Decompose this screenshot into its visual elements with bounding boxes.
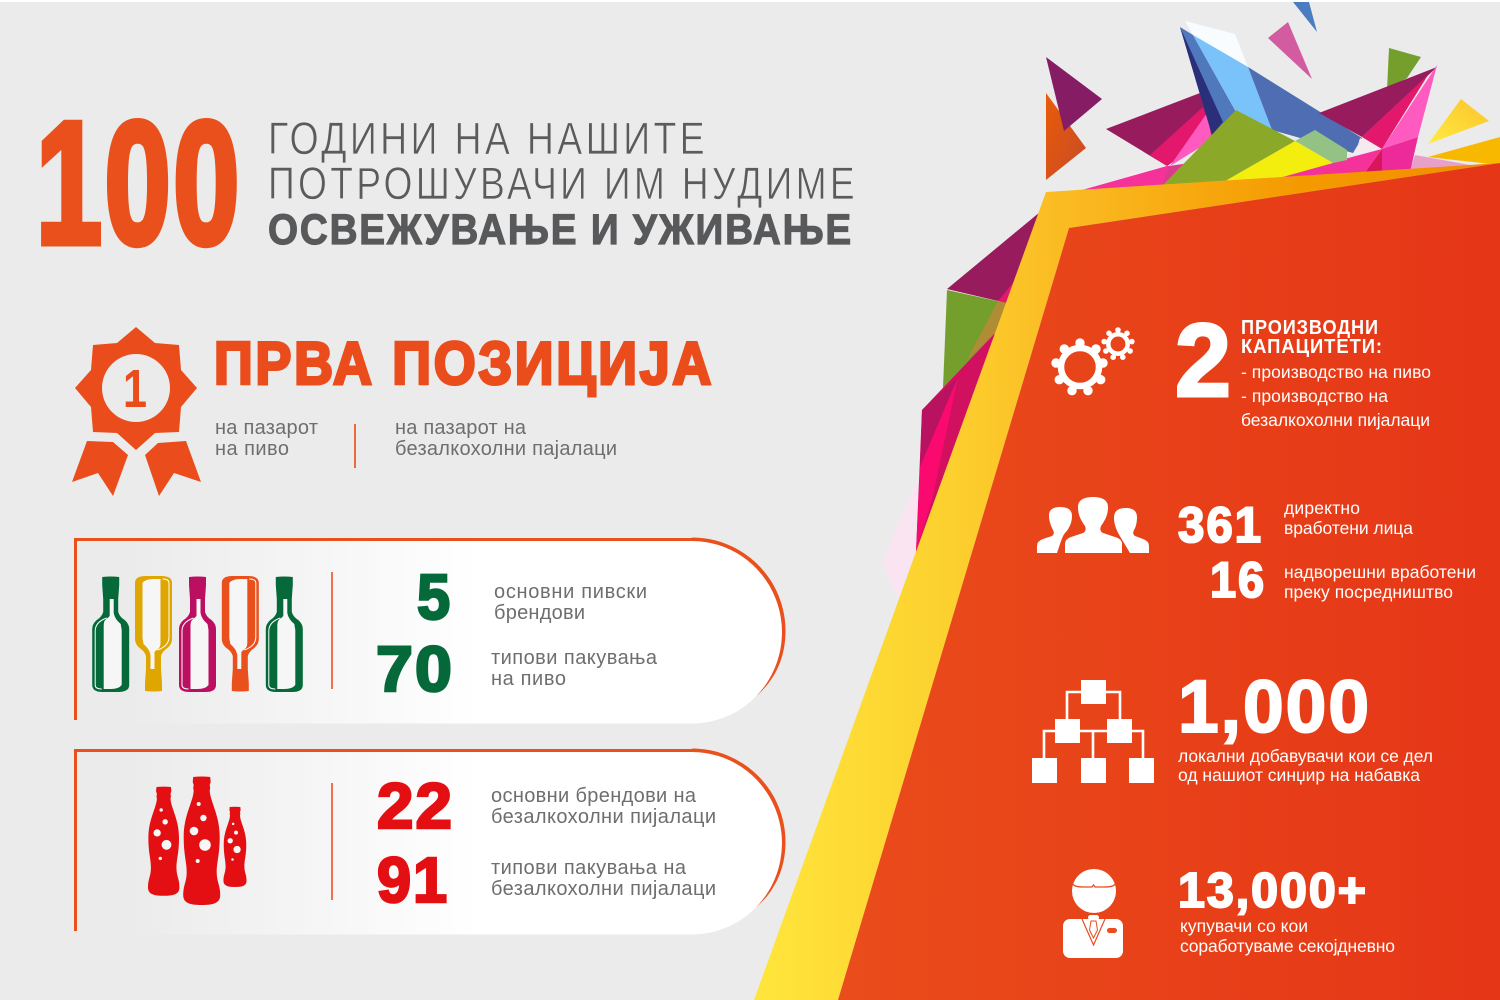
stat: 16 external employees: [1210, 552, 1476, 608]
number: 22 soft drink brands: 22: [377, 770, 454, 842]
stat: 16 external employees: надворешни вработени: [1284, 562, 1476, 582]
stat: 13,000+ customers: [1178, 864, 1395, 956]
icon: medal badge: [72, 327, 201, 496]
icon: gears: [1051, 327, 1135, 395]
stat: 16 external employees: 16: [1210, 552, 1266, 608]
stat: 2 production capacities: - производство на: [1241, 386, 1388, 406]
stat: 16 external employees: преку посредништво: [1284, 582, 1453, 602]
stat: 1,000 suppliers: локални добавувачи кои се дел: [1178, 746, 1433, 766]
icon: people: [1037, 497, 1149, 553]
heading: ОСВЕЖУВАЊЕ И УЖИВАЊЕ: [268, 206, 853, 254]
heading: first position: ПРВА ПОЗИЦИЈА: [214, 330, 714, 397]
number: 5 beer brands: 5: [417, 561, 452, 633]
red panel: [838, 163, 1500, 1000]
icon: beer bottles: [92, 576, 303, 692]
text: beer market: на пазарот: [215, 417, 318, 439]
stat: 1,000 suppliers: од нашиот синџир на набавка: [1178, 765, 1420, 785]
big number 100: 100: [36, 85, 242, 280]
icon: org chart: [1032, 680, 1154, 783]
stat: 2 production capacities: - производство на пиво: [1241, 362, 1431, 382]
text: soft drinks market: [395, 417, 617, 460]
icon: medal badge: 1: [123, 359, 147, 419]
stat: 361 direct employees: [1178, 497, 1413, 553]
heading: [268, 113, 858, 254]
icon: soft drink bottles: [148, 776, 247, 905]
stat: 2 production capacities: КАПАЦИТЕТИ:: [1241, 336, 1383, 358]
number: 5 beer brands: основни пивски: [494, 581, 647, 603]
number: 22 soft drink brands: безалкохолни пијалаци: [491, 806, 716, 828]
text: soft drinks market: на пазарот на: [395, 417, 527, 439]
number: 70 packaging types: 70: [376, 633, 454, 705]
number: 5 beer brands: брендови: [494, 602, 585, 624]
stat: 361 direct employees: вработени лица: [1284, 518, 1413, 538]
stat: 2 production capacities: [1175, 303, 1431, 430]
stat: 1,000 suppliers: 1,000: [1178, 665, 1371, 748]
yellow-orange band: [754, 163, 1500, 1000]
text: soft drinks market: безалкохолни пајалаци: [395, 438, 617, 460]
decorative colourful triangles top: [1046, 2, 1500, 192]
stat: 13,000+ customers: соработуваме секојдневно: [1180, 936, 1395, 956]
stat: 2 production capacities: безалкохолни пијалаци: [1241, 410, 1430, 430]
number: 70 packaging types: [376, 633, 658, 705]
number: 22 soft drink brands: [377, 770, 716, 842]
number: 70 packaging types: типови пакувања: [491, 647, 658, 669]
stat: 2 production capacities: 2: [1175, 303, 1231, 419]
number: 91 packaging types: [377, 844, 716, 916]
stat: 361 direct employees: директно: [1284, 498, 1360, 518]
number: 91 packaging types: безалкохолни пијалаци: [491, 878, 716, 900]
number: 91 packaging types: 91: [377, 844, 449, 916]
heading: ГОДИНИ НА НАШИТЕ: [268, 113, 708, 164]
number: 5 beer brands: [417, 561, 647, 633]
stat: 13,000+ customers: купувачи со кои: [1180, 916, 1308, 936]
number: 70 packaging types: на пиво: [491, 668, 566, 690]
number: 22 soft drink brands: основни брендови на: [491, 785, 697, 807]
stat: 361 direct employees: 361: [1178, 497, 1263, 553]
decorative shards left of band: [882, 212, 1040, 598]
text: beer market: на пиво: [215, 438, 289, 460]
heading: ПОТРОШУВАЧИ ИМ НУДИМЕ: [268, 158, 858, 209]
stat: 13,000+ customers: 13,000+: [1178, 864, 1368, 918]
panel: beer card: [75, 538, 786, 724]
stat: 2 production capacities: ПРОИЗВОДНИ: [1241, 317, 1379, 339]
panel: soft drinks card: [75, 748, 786, 935]
stat: 1,000 suppliers: [1178, 665, 1433, 785]
number: 91 packaging types: типови пакувања на: [491, 857, 687, 879]
icon: customer person: [1063, 869, 1123, 958]
text: beer market: [215, 417, 318, 460]
